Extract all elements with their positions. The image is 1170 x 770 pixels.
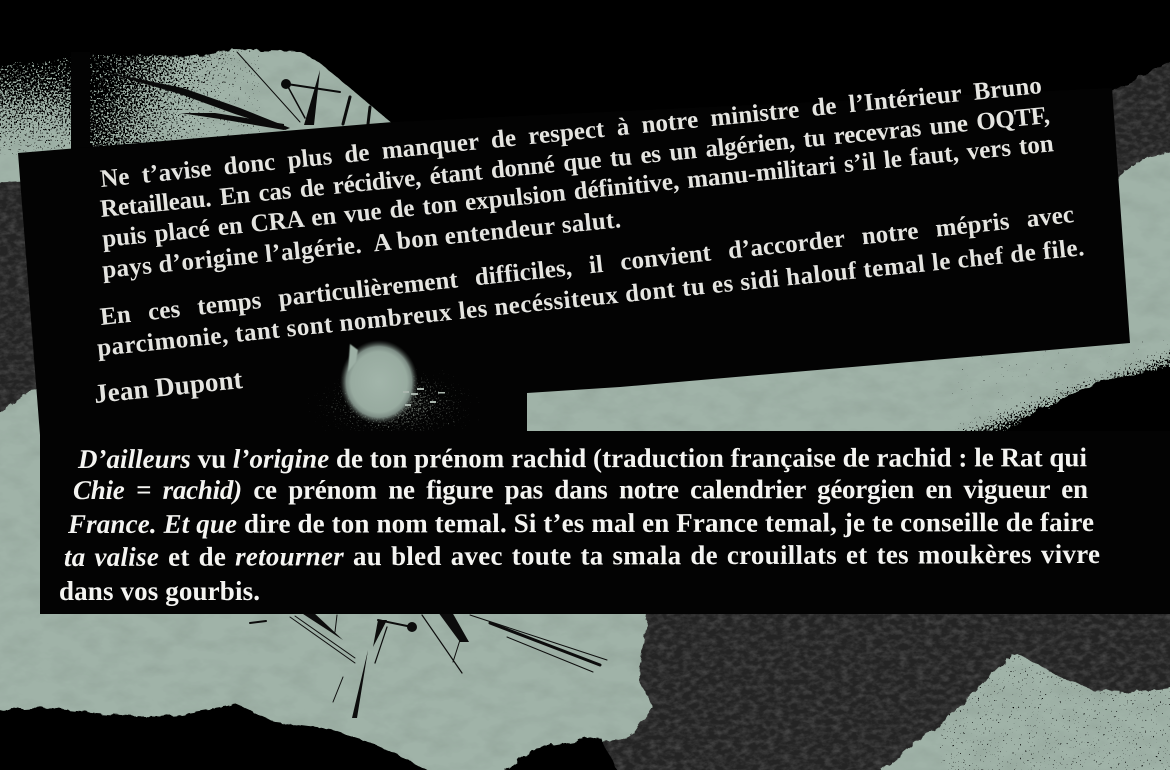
text block: upper paragraph one: Ne t’avise donc plus de manquer de respect à notre ministre de l’Intérieur Bruno	[99, 72, 1043, 193]
text block: upper paragraph one: puis placé en CRA en vue de ton expulsion définitive, manu-militari s’il le faut, vers ton	[101, 130, 1055, 253]
panel: upper letter excerpt background	[18, 88, 1130, 435]
text block: lower paragraph: ta valise et de retourner au bled avec toute ta smala de crouillats et tes moukères vivre	[64, 539, 1100, 572]
bright mint spot	[340, 340, 418, 424]
text block: upper paragraph one: pays d’origine l’algérie. A bon entendeur salut.	[101, 206, 622, 284]
text block: upper paragraph one: Retailleau. En cas de récidive, étant donné que tu es un algérien, tu recevras une OQTF,	[99, 102, 1051, 223]
text block: lower paragraph	[59, 442, 1100, 606]
text block: upper paragraph two: parcimonie, tant sont nombreux les necéssiteux dont tu es sidi halouf temal le chef de file.	[96, 234, 1085, 362]
brush strokes top	[100, 52, 370, 130]
text block: upper paragraph two: En ces temps particulièrement difficiles, il convient d’accorder notre mépris avec	[99, 201, 1075, 331]
text block: lower paragraph: Chie = rachid) ce prénom ne figure pas dans notre calendrier géorgien en vigueur en	[73, 474, 1088, 505]
vertical black bar top left	[71, 52, 90, 152]
signature: Jean Dupont	[93, 364, 244, 409]
text block: lower paragraph: D’ailleurs vu l’origine de ton prénom rachid (traduction française de rachid : le Rat qui	[77, 442, 1087, 474]
speckled grey haze behind the bright spot	[305, 363, 485, 447]
text block: lower paragraph: France. Et que dire de ton nom temal. Si t’es mal en France temal, je te conseille de faire	[67, 507, 1094, 539]
text block: lower paragraph: dans vos gourbis.	[59, 576, 260, 606]
small light dashes	[403, 388, 445, 406]
brush strokes bottom	[250, 612, 607, 718]
panel: lower letter excerpt background	[40, 431, 1170, 614]
text block: upper paragraph one	[99, 72, 1055, 284]
